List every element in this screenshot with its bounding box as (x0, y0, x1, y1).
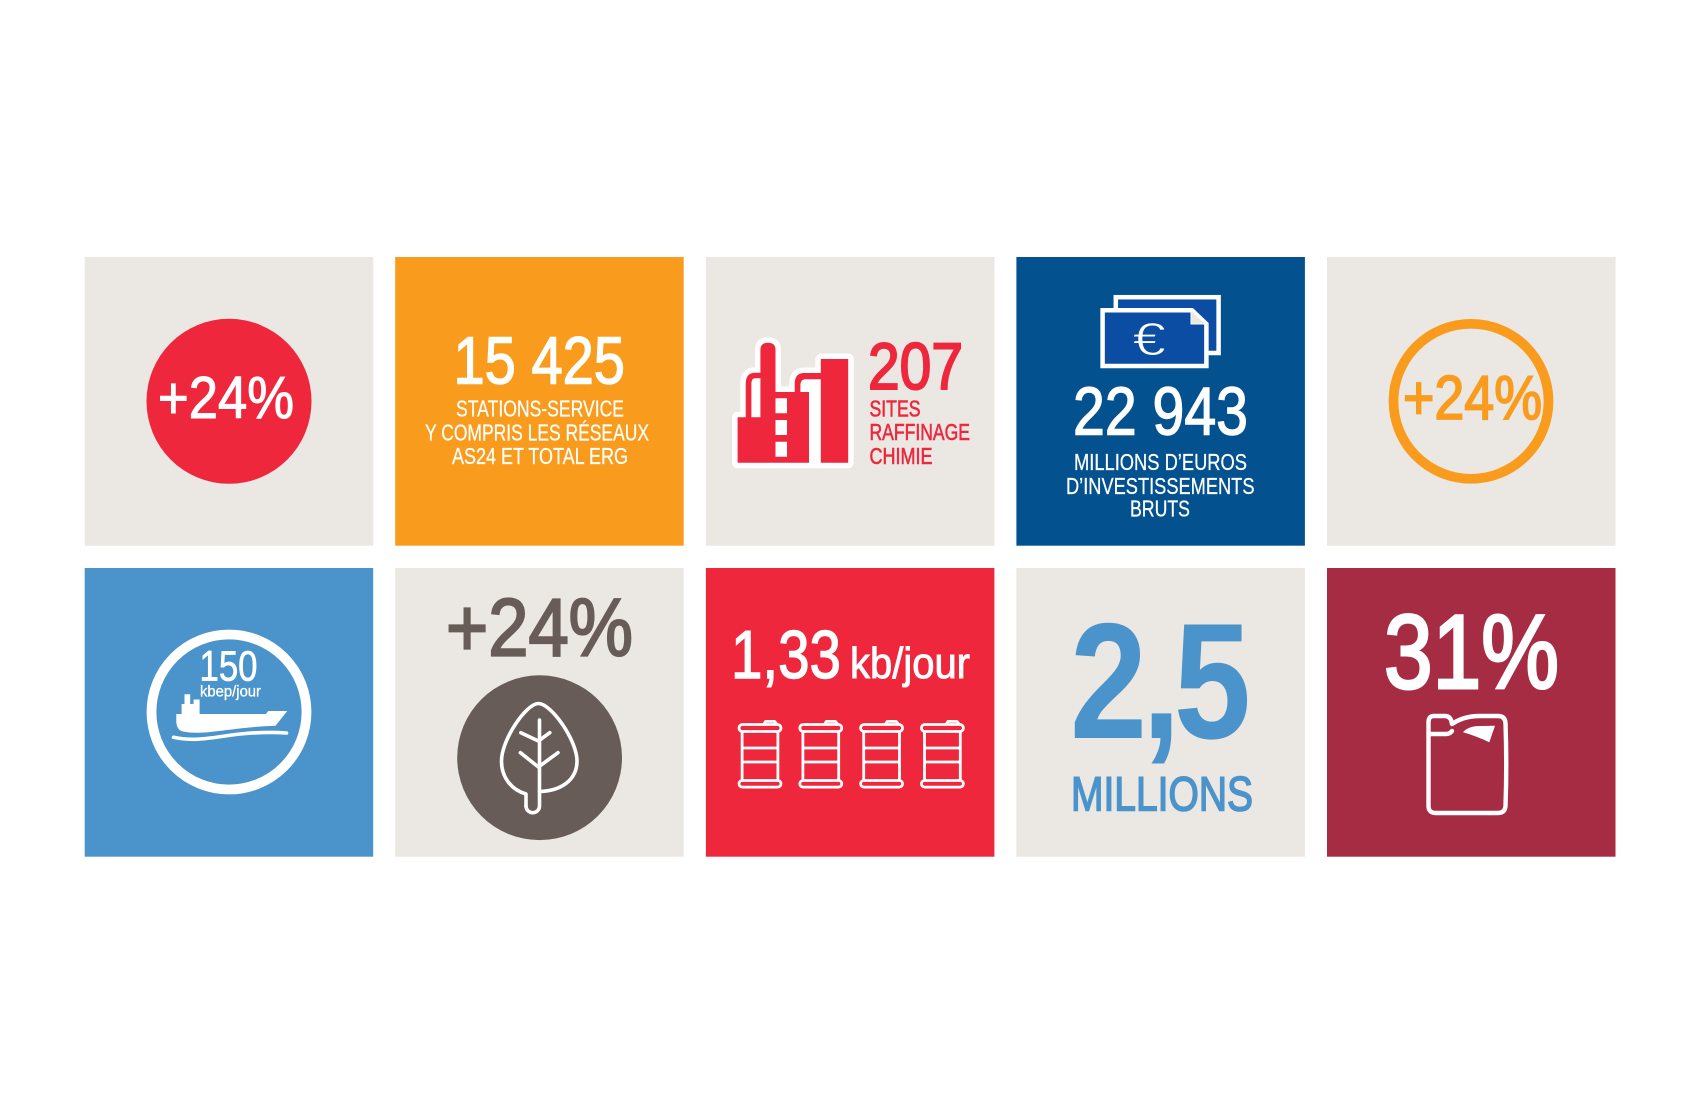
stat: 207: 207 (868, 329, 963, 403)
icon: orange ring (1394, 324, 1548, 479)
icon: barrel 4 (921, 721, 963, 787)
icon: barrels (739, 721, 963, 787)
panel: +24% leaf (395, 568, 684, 857)
text: stations description (425, 396, 649, 469)
icon: barrel 2 (800, 721, 842, 787)
text: investissements description (1066, 449, 1254, 522)
icon: barrel 1 (739, 721, 781, 787)
text: investissements description: BRUTS (1130, 496, 1190, 522)
icon: white ring (152, 634, 306, 790)
panel: stations-service (395, 257, 684, 546)
icon: factory (738, 343, 848, 463)
stat: 2,5: 2,5 (1070, 590, 1251, 774)
stat: 22 943: 22 943 (1073, 374, 1248, 450)
panel: +24% red circle (85, 257, 373, 546)
panel: +24% orange ring (1327, 257, 1616, 546)
text: stations description: STATIONS-SERVICE (456, 396, 624, 422)
icon: euro banknotes: € (1132, 313, 1166, 365)
icon: red circle (146, 319, 312, 484)
text: sites labels: SITES (870, 396, 920, 422)
icon: barrel 3 (861, 721, 903, 787)
text: kbep/jour: kbep/jour (200, 684, 262, 701)
text: sites labels: RAFFINAGE (870, 419, 970, 445)
icon: leaf (502, 704, 577, 813)
stat: 1,33: 1,33 (731, 617, 841, 693)
stat: +24%: +24% (446, 582, 633, 674)
stat: +24%: +24% (158, 365, 294, 431)
text: investissements description: D’INVESTISSEMENTS (1066, 473, 1254, 499)
text: investissements description: MILLIONS D’EUROS (1074, 449, 1247, 475)
icon: euro banknotes (1103, 297, 1219, 366)
panel: investissements (1016, 257, 1305, 546)
panel: sites raffinage chimie (706, 257, 994, 546)
stat: 31%: 31% (1384, 594, 1559, 711)
text: stations description: Y COMPRIS LES RÉSEAUX (425, 420, 649, 446)
text: kb/jour: kb/jour (850, 639, 970, 688)
panel: tanker production (85, 568, 373, 857)
stat: 15 425: 15 425 (454, 324, 625, 398)
icon: jerrycan (1428, 716, 1506, 813)
text: sites labels: CHIMIE (870, 443, 932, 469)
text: stations description: AS24 ET TOTAL ERG (452, 443, 628, 469)
panel: kb/jour barrels (706, 568, 994, 857)
panel: 2,5 millions (1016, 568, 1305, 857)
stat: 150: 150 (200, 642, 258, 690)
text: MILLIONS: MILLIONS (1071, 768, 1253, 822)
text: sites labels (870, 396, 970, 469)
icon: dark circle (457, 675, 622, 840)
panel: 31% jerrycan (1327, 568, 1616, 857)
stat: +24%: +24% (1403, 364, 1542, 433)
icon: ship (174, 694, 287, 739)
